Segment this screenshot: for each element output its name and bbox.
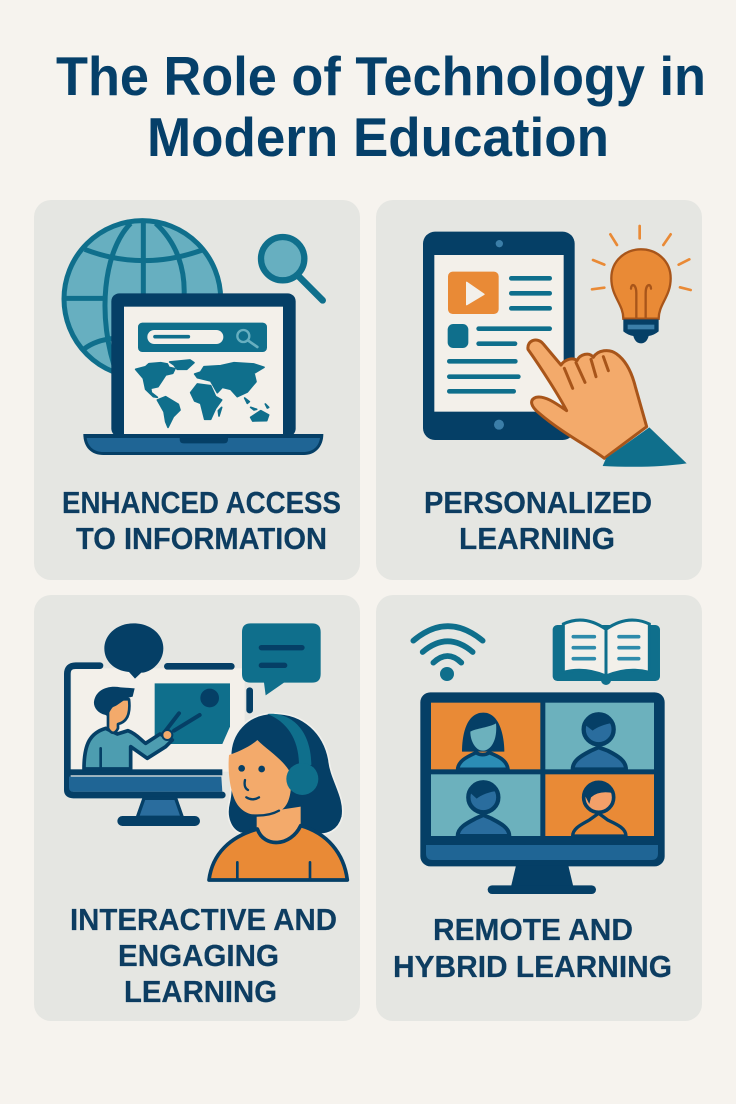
panel: enhanced access to information bbox=[34, 200, 360, 580]
panel: interactive and engaging learning bbox=[34, 595, 360, 1021]
speech bubble: dark bbox=[104, 623, 163, 679]
teacher bbox=[84, 687, 200, 769]
icon: laptop bbox=[83, 293, 323, 455]
icon: monitor with video call bbox=[420, 692, 665, 894]
icon: sleeve bbox=[603, 427, 687, 467]
icon: wifi bbox=[413, 626, 483, 681]
participant: top left bbox=[458, 713, 508, 769]
heading bbox=[424, 485, 652, 556]
heading: PERSONALIZED bbox=[424, 485, 652, 520]
heading bbox=[62, 485, 341, 556]
heading: INTERACTIVE AND bbox=[70, 902, 337, 937]
presentation board bbox=[155, 683, 230, 744]
illustration: teacher on monitor and student with headset bbox=[67, 623, 347, 880]
title: Modern Education bbox=[147, 106, 609, 168]
icon: light bulb bbox=[592, 226, 691, 343]
search bar bbox=[138, 323, 267, 352]
heading: TO INFORMATION bbox=[76, 521, 327, 556]
icon: tablet bbox=[423, 232, 575, 440]
icon: monitor bbox=[67, 666, 250, 826]
icon: globe bbox=[64, 221, 221, 377]
icon: open book bbox=[553, 620, 660, 685]
heading: ENHANCED ACCESS bbox=[62, 485, 341, 520]
illustration: wifi, book and video call bbox=[413, 620, 665, 894]
title bbox=[56, 45, 706, 168]
heading: LEARNING bbox=[459, 521, 615, 556]
title: The Role of Technology in bbox=[56, 45, 706, 107]
speech bubble: teal bbox=[242, 623, 321, 695]
participant: bottom left bbox=[458, 782, 509, 836]
heading: ENGAGING bbox=[118, 938, 279, 973]
heading bbox=[393, 912, 672, 984]
panel: remote and hybrid learning bbox=[376, 595, 702, 1021]
participant: top right bbox=[573, 714, 626, 769]
world map bbox=[136, 360, 269, 427]
heading: HYBRID LEARNING bbox=[393, 949, 672, 984]
illustration: tablet, hand and light bulb bbox=[423, 226, 691, 467]
illustration: globe, laptop and magnifier bbox=[64, 221, 323, 455]
icon: pointing hand bbox=[528, 340, 647, 458]
panel: personalized learning bbox=[376, 200, 702, 580]
heading bbox=[70, 902, 337, 1009]
student with headset bbox=[209, 713, 347, 880]
icon: magnifier bbox=[261, 237, 323, 300]
heading: LEARNING bbox=[124, 974, 277, 1009]
heading: REMOTE AND bbox=[433, 912, 633, 947]
participant: bottom right bbox=[573, 782, 626, 836]
